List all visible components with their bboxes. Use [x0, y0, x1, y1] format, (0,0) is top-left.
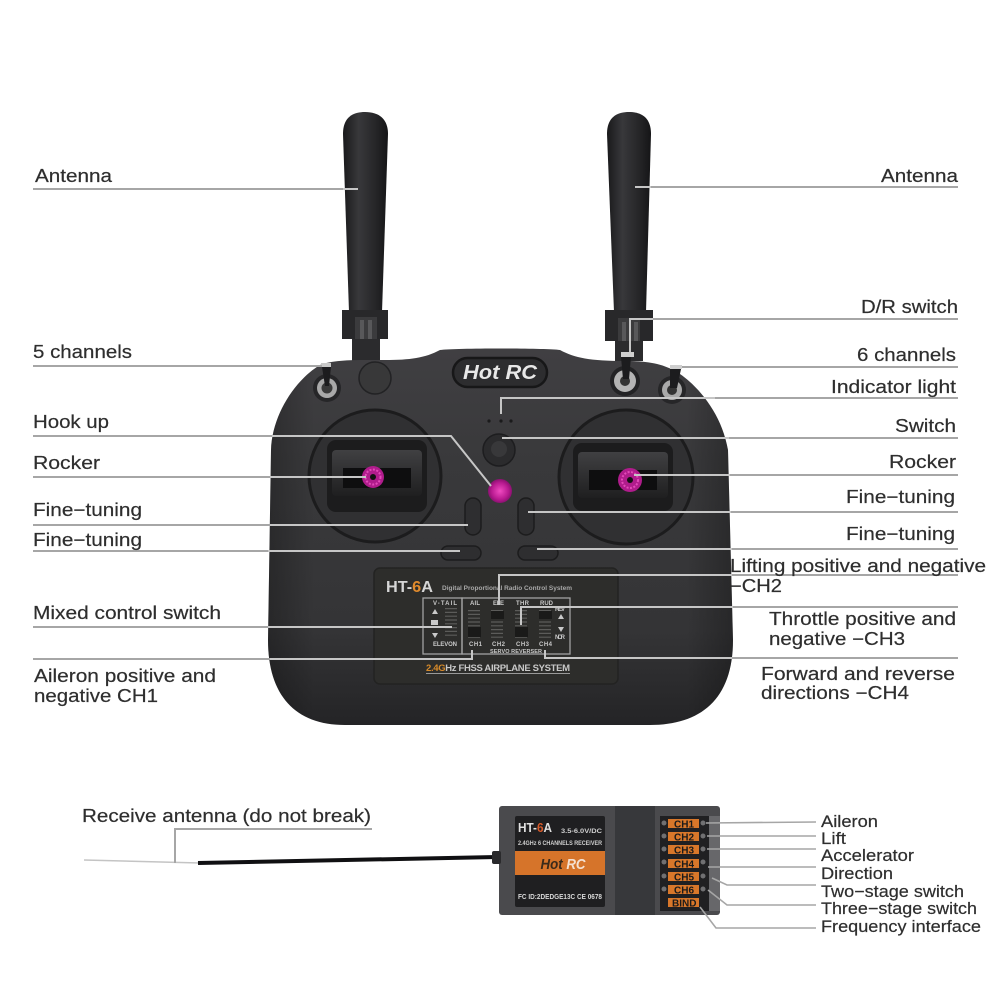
receiver label: Hot RC: [540, 856, 587, 873]
labels right: Antenna: [881, 166, 959, 186]
switch panel: Digital Proportional Radio Control System: [442, 585, 572, 592]
channel pins: CH3: [674, 846, 694, 856]
receiver labels: Accelerator: [821, 847, 915, 865]
labels right: 6 channels: [857, 345, 956, 365]
transmitter body: [268, 348, 733, 725]
labels right: Fine−tuning: [846, 487, 955, 507]
switch panel: RUD: [540, 601, 554, 607]
labels left: Hook up: [33, 412, 109, 432]
receiver label: [515, 816, 605, 907]
left gimbal: [309, 410, 441, 542]
fine-tuning trims: [441, 498, 558, 560]
switch panel: CH2: [492, 642, 506, 648]
channel pins: CH6: [674, 886, 694, 896]
left antenna: [342, 112, 388, 361]
right toggle switch: [658, 365, 686, 404]
switch panel: CH4: [539, 642, 553, 648]
left toggle switch: [313, 363, 341, 402]
power switch: [483, 434, 515, 466]
channel pins: CH2: [674, 832, 694, 844]
labels left: 5 channels: [33, 342, 132, 362]
logo badge: Hot RC: [463, 362, 538, 384]
receiver label: 3.5-6.0V/DC: [561, 828, 602, 835]
switch panel: V-TAIL: [433, 601, 457, 607]
switch panel: CH1: [469, 642, 483, 648]
labels right: negative −CH3: [769, 629, 905, 649]
receiver label: 2.4GHz 6 CHANNELS RECEIVER: [518, 841, 603, 847]
receiver labels: Lift: [821, 830, 846, 848]
labels right: Rocker: [889, 452, 956, 472]
receiver label: FC ID:2DEDGE13C CE 0678: [518, 894, 602, 901]
round button cover: [359, 362, 391, 394]
switch panel: REV: [555, 607, 565, 613]
receiver labels: Two−stage switch: [821, 883, 964, 901]
receiver label: HT-6A: [518, 821, 552, 835]
labels right: directions −CH4: [761, 683, 909, 703]
logo badge: [453, 358, 547, 387]
switch panel: ELEVON: [433, 642, 457, 648]
labels left: Rocker: [33, 453, 100, 473]
switch panel: ELE: [493, 601, 504, 607]
switch panel: AIL: [470, 601, 480, 607]
switch panel: THR: [516, 601, 530, 607]
switch panel: NOR: [555, 635, 566, 641]
receiver leader lines: [700, 822, 816, 928]
receiver antenna: [84, 851, 501, 864]
switch panel: 2.4GHz FHSS AIRPLANE SYSTEM: [426, 663, 570, 674]
labels right: D/R switch: [861, 297, 958, 317]
right gimbal: [559, 410, 693, 544]
labels right: Fine−tuning: [846, 524, 955, 544]
channel pins: CH4: [674, 860, 694, 870]
labels left: Fine−tuning: [33, 500, 142, 520]
receiver labels: Aileron: [821, 813, 878, 831]
receiver: [499, 806, 720, 915]
right pink stick: [618, 468, 642, 492]
switch panel: CH3: [516, 642, 530, 648]
labels right: Forward and reverse: [761, 664, 955, 684]
channel pins: BIND: [672, 898, 696, 910]
leader lines: [33, 187, 958, 659]
labels left: negative CH1: [34, 686, 158, 706]
receiver labels: Frequency interface: [821, 918, 981, 936]
receive antenna label: Receive antenna (do not break): [82, 806, 371, 826]
switch panel: SERVO REVERSER: [490, 649, 542, 655]
labels left: Antenna: [35, 166, 113, 186]
left pink stick: [362, 466, 384, 488]
channel pins: CH5: [674, 872, 694, 884]
receiver labels: [821, 813, 981, 936]
receiver labels: Direction: [821, 865, 893, 883]
labels left: Aileron positive and: [34, 666, 216, 686]
labels left: Mixed control switch: [33, 603, 221, 623]
channel pins: CH1: [674, 820, 694, 830]
labels right: Lifting positive and negative: [730, 556, 986, 576]
receive antenna leader: [175, 829, 372, 863]
labels right: [730, 166, 986, 703]
centre toggle switch: [610, 352, 640, 396]
indicator lights: [487, 419, 513, 423]
receiver labels: Three−stage switch: [821, 900, 977, 918]
labels left: Fine−tuning: [33, 530, 142, 550]
labels right: Switch: [895, 416, 956, 436]
right antenna: [605, 112, 653, 361]
switch panel: HT-6A: [386, 579, 433, 596]
switch panel: [374, 568, 618, 684]
hook-up pink button: [488, 479, 512, 503]
labels right: Indicator light: [831, 377, 956, 397]
labels right: Throttle positive and: [769, 609, 956, 629]
channel pins: [660, 816, 709, 911]
labels left: [33, 166, 221, 706]
labels right: −CH2: [730, 576, 782, 596]
